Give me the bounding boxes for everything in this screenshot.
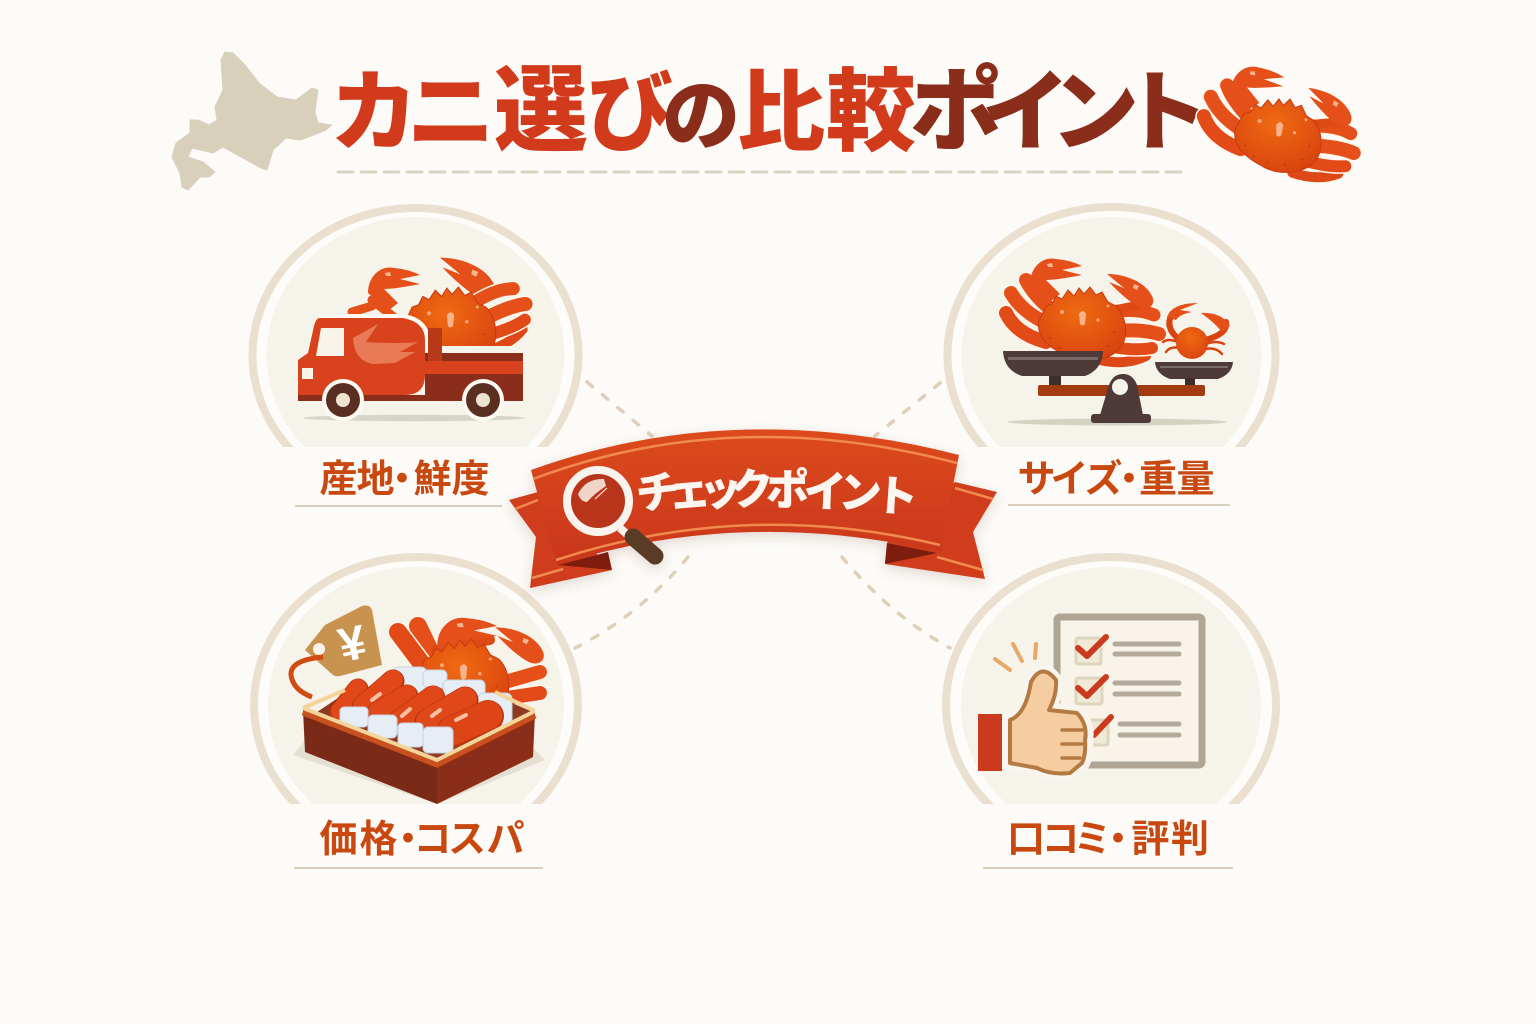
title: ト — [1121, 63, 1209, 162]
ribbon folds — [558, 543, 937, 570]
ribbon left tail — [509, 492, 612, 588]
title: イ — [982, 63, 1070, 162]
title: 較 — [826, 63, 916, 163]
label underline — [295, 505, 502, 507]
label: size and weight: サイズ・重量 — [1018, 458, 1215, 501]
icon: thumbs up hand — [978, 644, 1086, 773]
panel: reviews and reputation — [946, 557, 1276, 868]
circle frame — [248, 204, 582, 447]
title: 選 — [494, 58, 588, 163]
label underline — [294, 867, 543, 869]
label underline — [1008, 504, 1230, 506]
ribbon main band — [531, 429, 959, 565]
panel: price and value — [254, 557, 578, 868]
crab legs in box — [340, 680, 488, 732]
banner text: チェックポイント — [633, 466, 920, 523]
title dashed underline — [338, 170, 1183, 174]
infographic canvas — [172, 52, 1362, 869]
title: 比 — [737, 63, 825, 162]
title: カ — [330, 63, 418, 162]
circle frame — [944, 203, 1280, 447]
label underline — [983, 867, 1233, 869]
map: Hokkaido silhouette — [172, 52, 332, 190]
panel: size and weight — [948, 207, 1276, 505]
circle frame — [942, 553, 1280, 804]
crushed ice, front — [340, 707, 453, 753]
icon: checklist — [1057, 617, 1202, 765]
label: origin and freshness: 産地・鮮度 — [320, 459, 490, 501]
title: ニ — [407, 63, 495, 162]
title: ポ — [910, 61, 1002, 163]
icon: crab box with price tag — [291, 606, 545, 804]
icon: crabs on balance scale — [1003, 259, 1233, 426]
dashed connectors — [575, 382, 950, 648]
circle frame — [250, 553, 582, 804]
icon: crab on truck — [298, 258, 537, 421]
price tag yen sign: ¥ — [334, 616, 371, 673]
title: び — [587, 66, 673, 162]
icon: title crab — [1199, 62, 1362, 181]
ribbon right tail — [885, 482, 997, 579]
label: reviews and reputation: 口コミ・評判 — [1007, 819, 1209, 861]
title: の — [662, 72, 740, 160]
panel: origin and freshness — [252, 208, 578, 506]
title: ン — [1051, 63, 1139, 162]
icon: magnifying glass — [567, 470, 655, 556]
banner: check point ribbon — [509, 429, 997, 588]
crushed ice, back — [393, 667, 512, 725]
label: price and value: 価格・コスパ — [320, 819, 525, 861]
